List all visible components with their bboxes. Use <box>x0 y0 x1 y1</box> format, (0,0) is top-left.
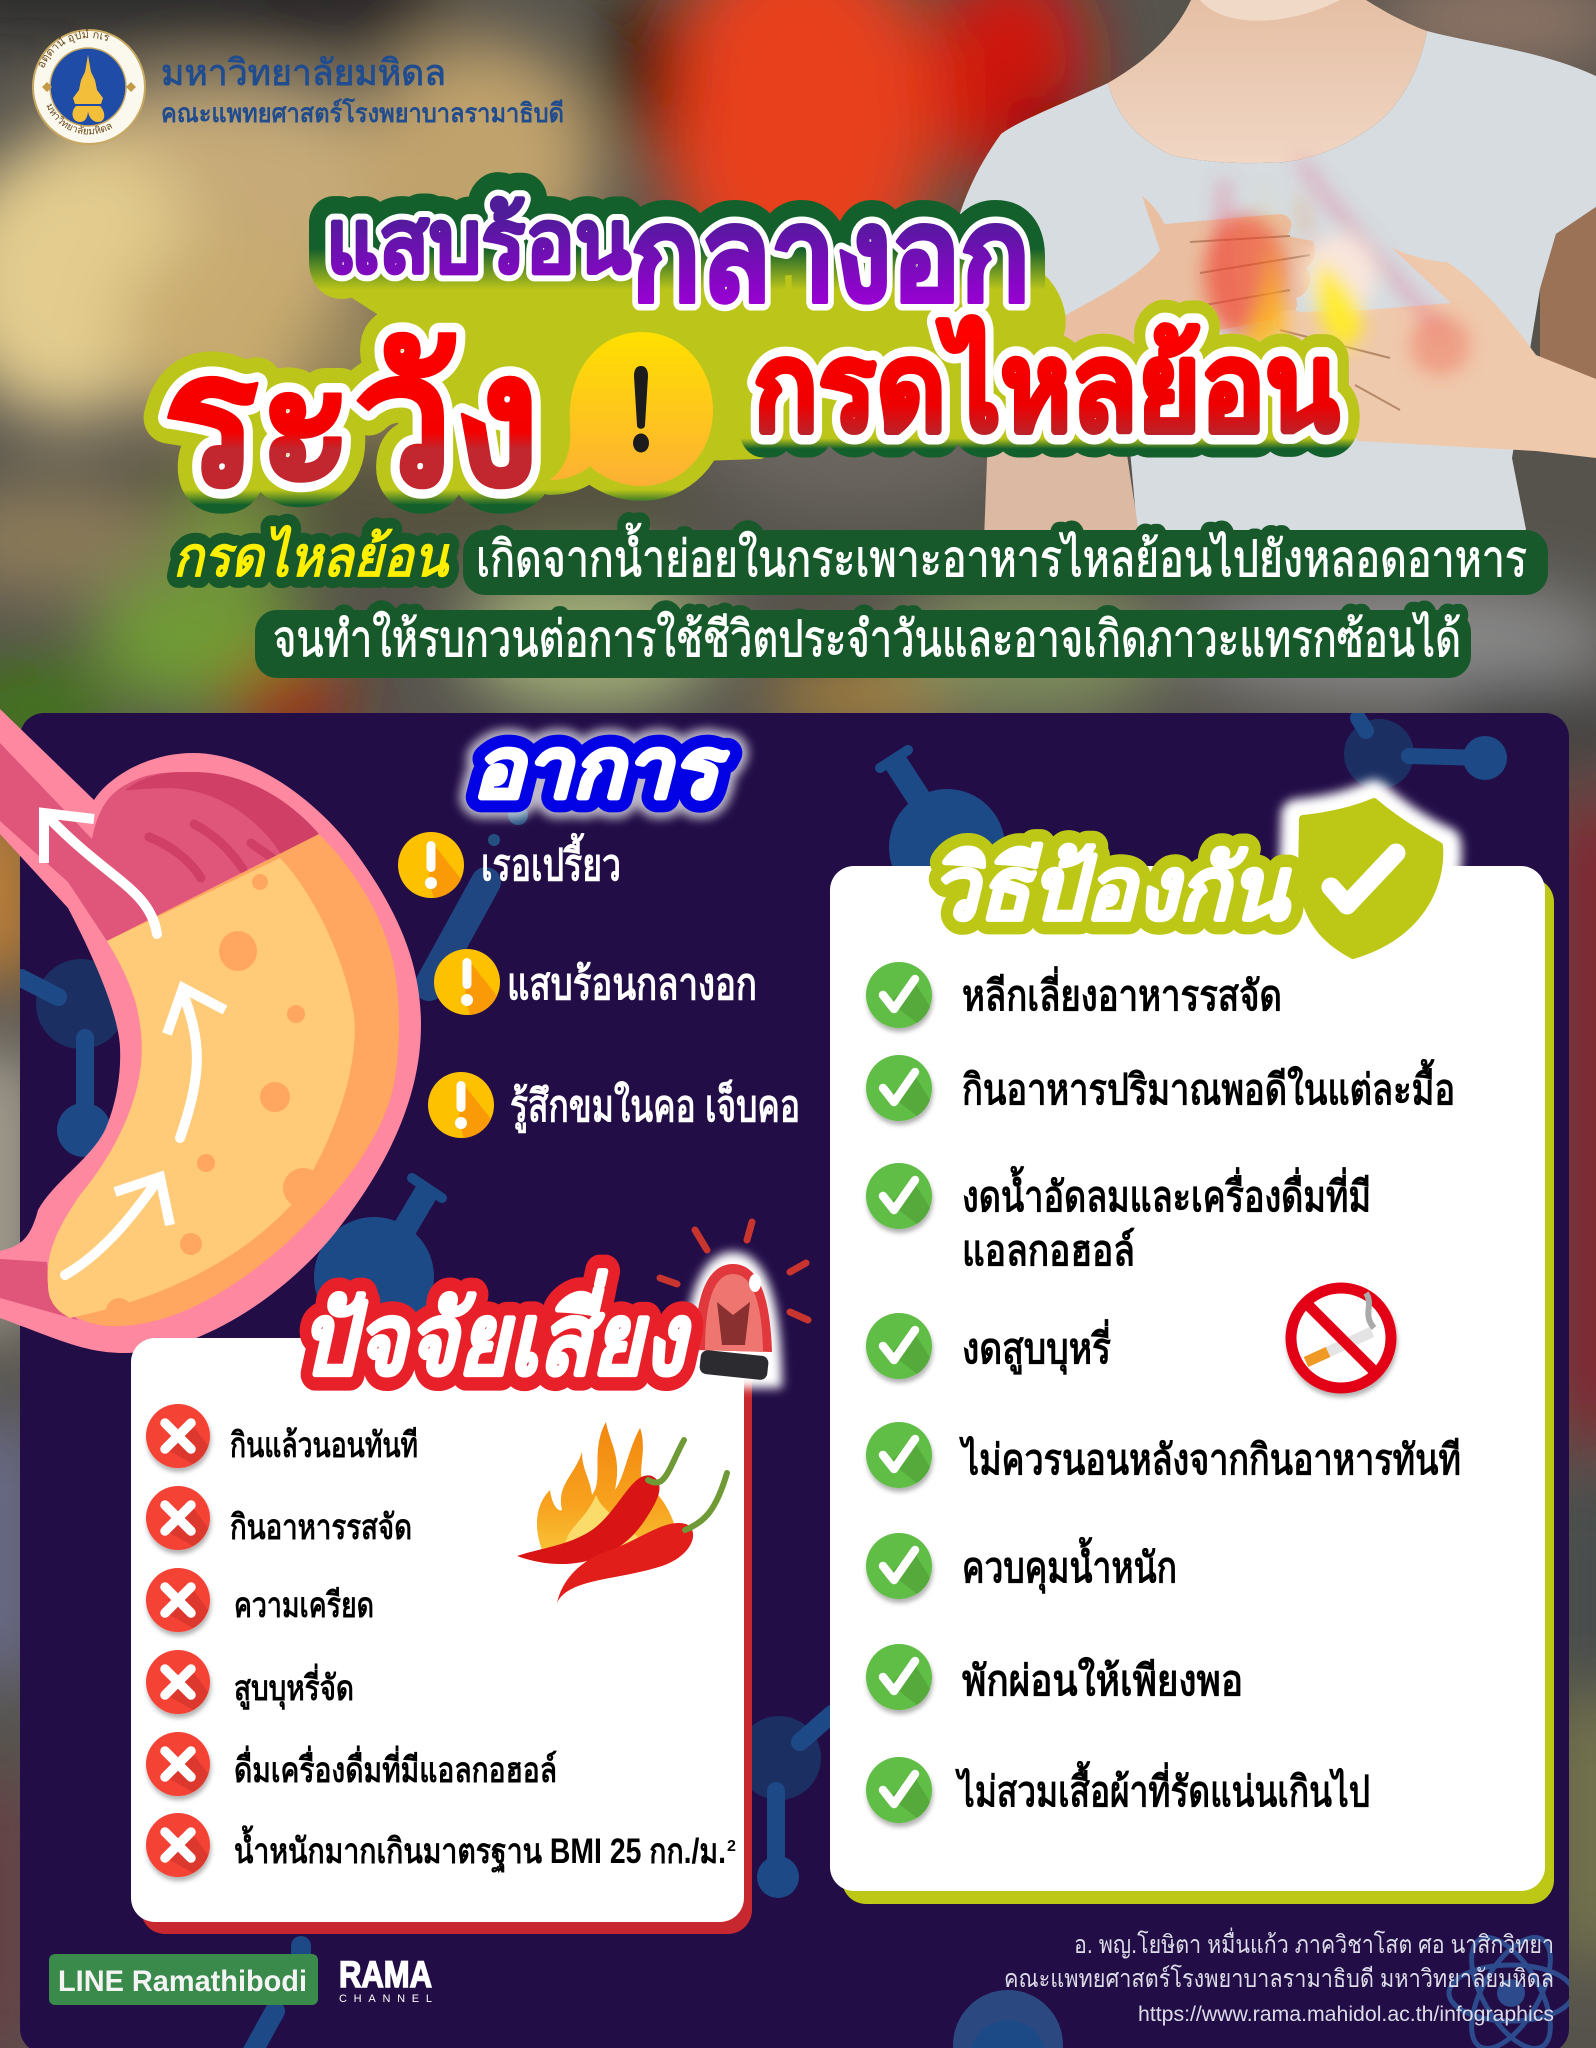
fire on chest <box>1203 160 1470 375</box>
risk list: กินอาหารรสจัด <box>230 1508 412 1547</box>
symptom 1: เรอเปรี้ยว <box>481 832 621 890</box>
university name <box>161 52 564 128</box>
title outlines: ระวัง <box>163 318 540 524</box>
right hand <box>1275 248 1596 458</box>
prevention list: งดน้ำอัดลมและเครื่องดื่มที่มี <box>962 1165 1371 1220</box>
risk list: ดื่มเครื่องดื่มที่มีแอลกอฮอล์ <box>234 1745 557 1790</box>
title line 1: แสบร้อน <box>326 192 631 291</box>
panel: risk factors <box>131 1222 808 1934</box>
neck and chest skin <box>1108 0 1427 163</box>
LINE Ramathibodi badge: LINE Ramathibodi <box>58 1965 307 1998</box>
symptoms heading: อาการ <box>472 721 730 815</box>
risk heading: ปัจจัยเสี่ยง <box>300 1269 691 1396</box>
symptom 3: รู้สึกขมในคอ เจ็บคอ <box>510 1079 800 1133</box>
title line 1: กลางอก <box>631 182 1030 328</box>
symptom 1 <box>398 832 621 898</box>
prevention list: ไม่สวมเสื้อผ้าที่รัดแน่นเกินไป <box>955 1760 1370 1815</box>
description text: กรดไหลย้อน <box>173 524 450 588</box>
university name: คณะแพทยศาสตร์โรงพยาบาลรามาธิบดี <box>161 98 564 128</box>
symptoms heading: อาการ <box>472 721 730 815</box>
symptom 2: แสบร้อนกลางอก <box>507 960 757 1009</box>
RAMA Channel logo <box>339 1954 432 2005</box>
photo: woman holding her chest <box>950 0 1596 540</box>
icon: red siren <box>660 1222 808 1388</box>
risk heading: ปัจจัยเสี่ยง <box>300 1269 691 1396</box>
title line 1: แสบร้อน <box>326 192 631 291</box>
shield <box>1302 802 1439 955</box>
title outlines <box>163 182 1339 524</box>
risk list <box>146 1404 736 1877</box>
prevention heading with shield: วิธีป้องกัน <box>930 839 1292 938</box>
prevention heading with shield: วิธีป้องกัน <box>930 839 1292 938</box>
RAMA Channel logo: CHANNEL <box>339 1993 432 2005</box>
risk list: 2 <box>727 1838 736 1855</box>
prevention list: ไม่ควรนอนหลังจากกินอาหารทันที <box>959 1435 1461 1483</box>
risk list: น้ำหนักมากเกินมาตรฐาน BMI 25 กก./ม. <box>234 1825 726 1874</box>
title outlines: แสบร้อน <box>326 192 631 291</box>
prevention list: พักผ่อนให้เพียงพอ <box>962 1656 1243 1704</box>
finger lines <box>1190 236 1400 410</box>
description text <box>173 523 1548 678</box>
prevention list: หลีกเลี่ยงอาหารรสจัด <box>962 966 1282 1019</box>
title outlines: กรดไหลย้อน <box>753 317 1339 457</box>
title olive backing <box>345 280 1059 460</box>
risk list: กินแล้วนอนทันที <box>230 1426 418 1465</box>
title line 2 right: กรดไหลย้อน <box>753 317 1339 457</box>
LINE Ramathibodi badge <box>49 1954 318 2005</box>
prevention list: แอลกอฮอล์ <box>962 1227 1135 1274</box>
chin <box>1200 0 1340 21</box>
title line 1: กลางอก <box>631 182 1030 328</box>
background molecules <box>21 718 1573 2048</box>
icon: flames and chillies <box>517 1422 727 1603</box>
logo: Mahidol University seal <box>32 29 146 145</box>
title outlines: กลางอก <box>631 182 1030 328</box>
dark purple panel <box>20 713 1573 2048</box>
prevention list: กินอาหารปริมาณพอดีในแต่ละมื้อ <box>962 1058 1455 1113</box>
symptom 2 <box>434 949 757 1015</box>
prevention heading with shield <box>930 796 1446 961</box>
speech bubble warning <box>550 332 713 486</box>
symptom 3 <box>428 1072 800 1138</box>
prevention list: ควบคุมน้ำหนัก <box>962 1536 1177 1594</box>
university name: มหาวิทยาลัยมหิดล <box>161 52 446 93</box>
left arm <box>984 310 1140 540</box>
prevention list: งดสูบบุหรี่ <box>962 1319 1111 1375</box>
risk list: สูบบุหรี่จัด <box>234 1663 354 1710</box>
credits: https://www.rama.mahidol.ac.th/infographics <box>1138 2003 1554 2026</box>
title line 2 left: ระวัง <box>163 318 540 524</box>
title line 2 right: กรดไหลย้อน <box>753 317 1339 457</box>
icon: no smoking <box>1291 1288 1391 1388</box>
prevention list <box>866 962 1461 1823</box>
arrows <box>44 813 225 1275</box>
logo: Mahidol University seal: มหาวิทยาลัยมหิดล <box>46 104 112 135</box>
symptoms heading: อาการ <box>472 721 730 815</box>
RAMA Channel logo: RAMA <box>339 1954 432 1995</box>
logo: Mahidol University seal: อตฺตานํ อุปมํ กเร <box>38 29 110 68</box>
symptoms list <box>398 832 800 1138</box>
right arm <box>1540 207 1596 385</box>
illustration: stomach with acid reflux <box>0 709 421 1353</box>
shirt <box>950 31 1596 540</box>
title line 2 left: ระวัง <box>163 318 540 524</box>
left hand <box>1025 196 1315 380</box>
main title block <box>163 182 1339 524</box>
risk list: ความเครียด <box>234 1586 374 1625</box>
shield glow <box>1295 796 1446 961</box>
credits <box>1004 1927 1554 2026</box>
title line 1 <box>326 182 1030 328</box>
panel: prevention <box>830 796 1554 1904</box>
